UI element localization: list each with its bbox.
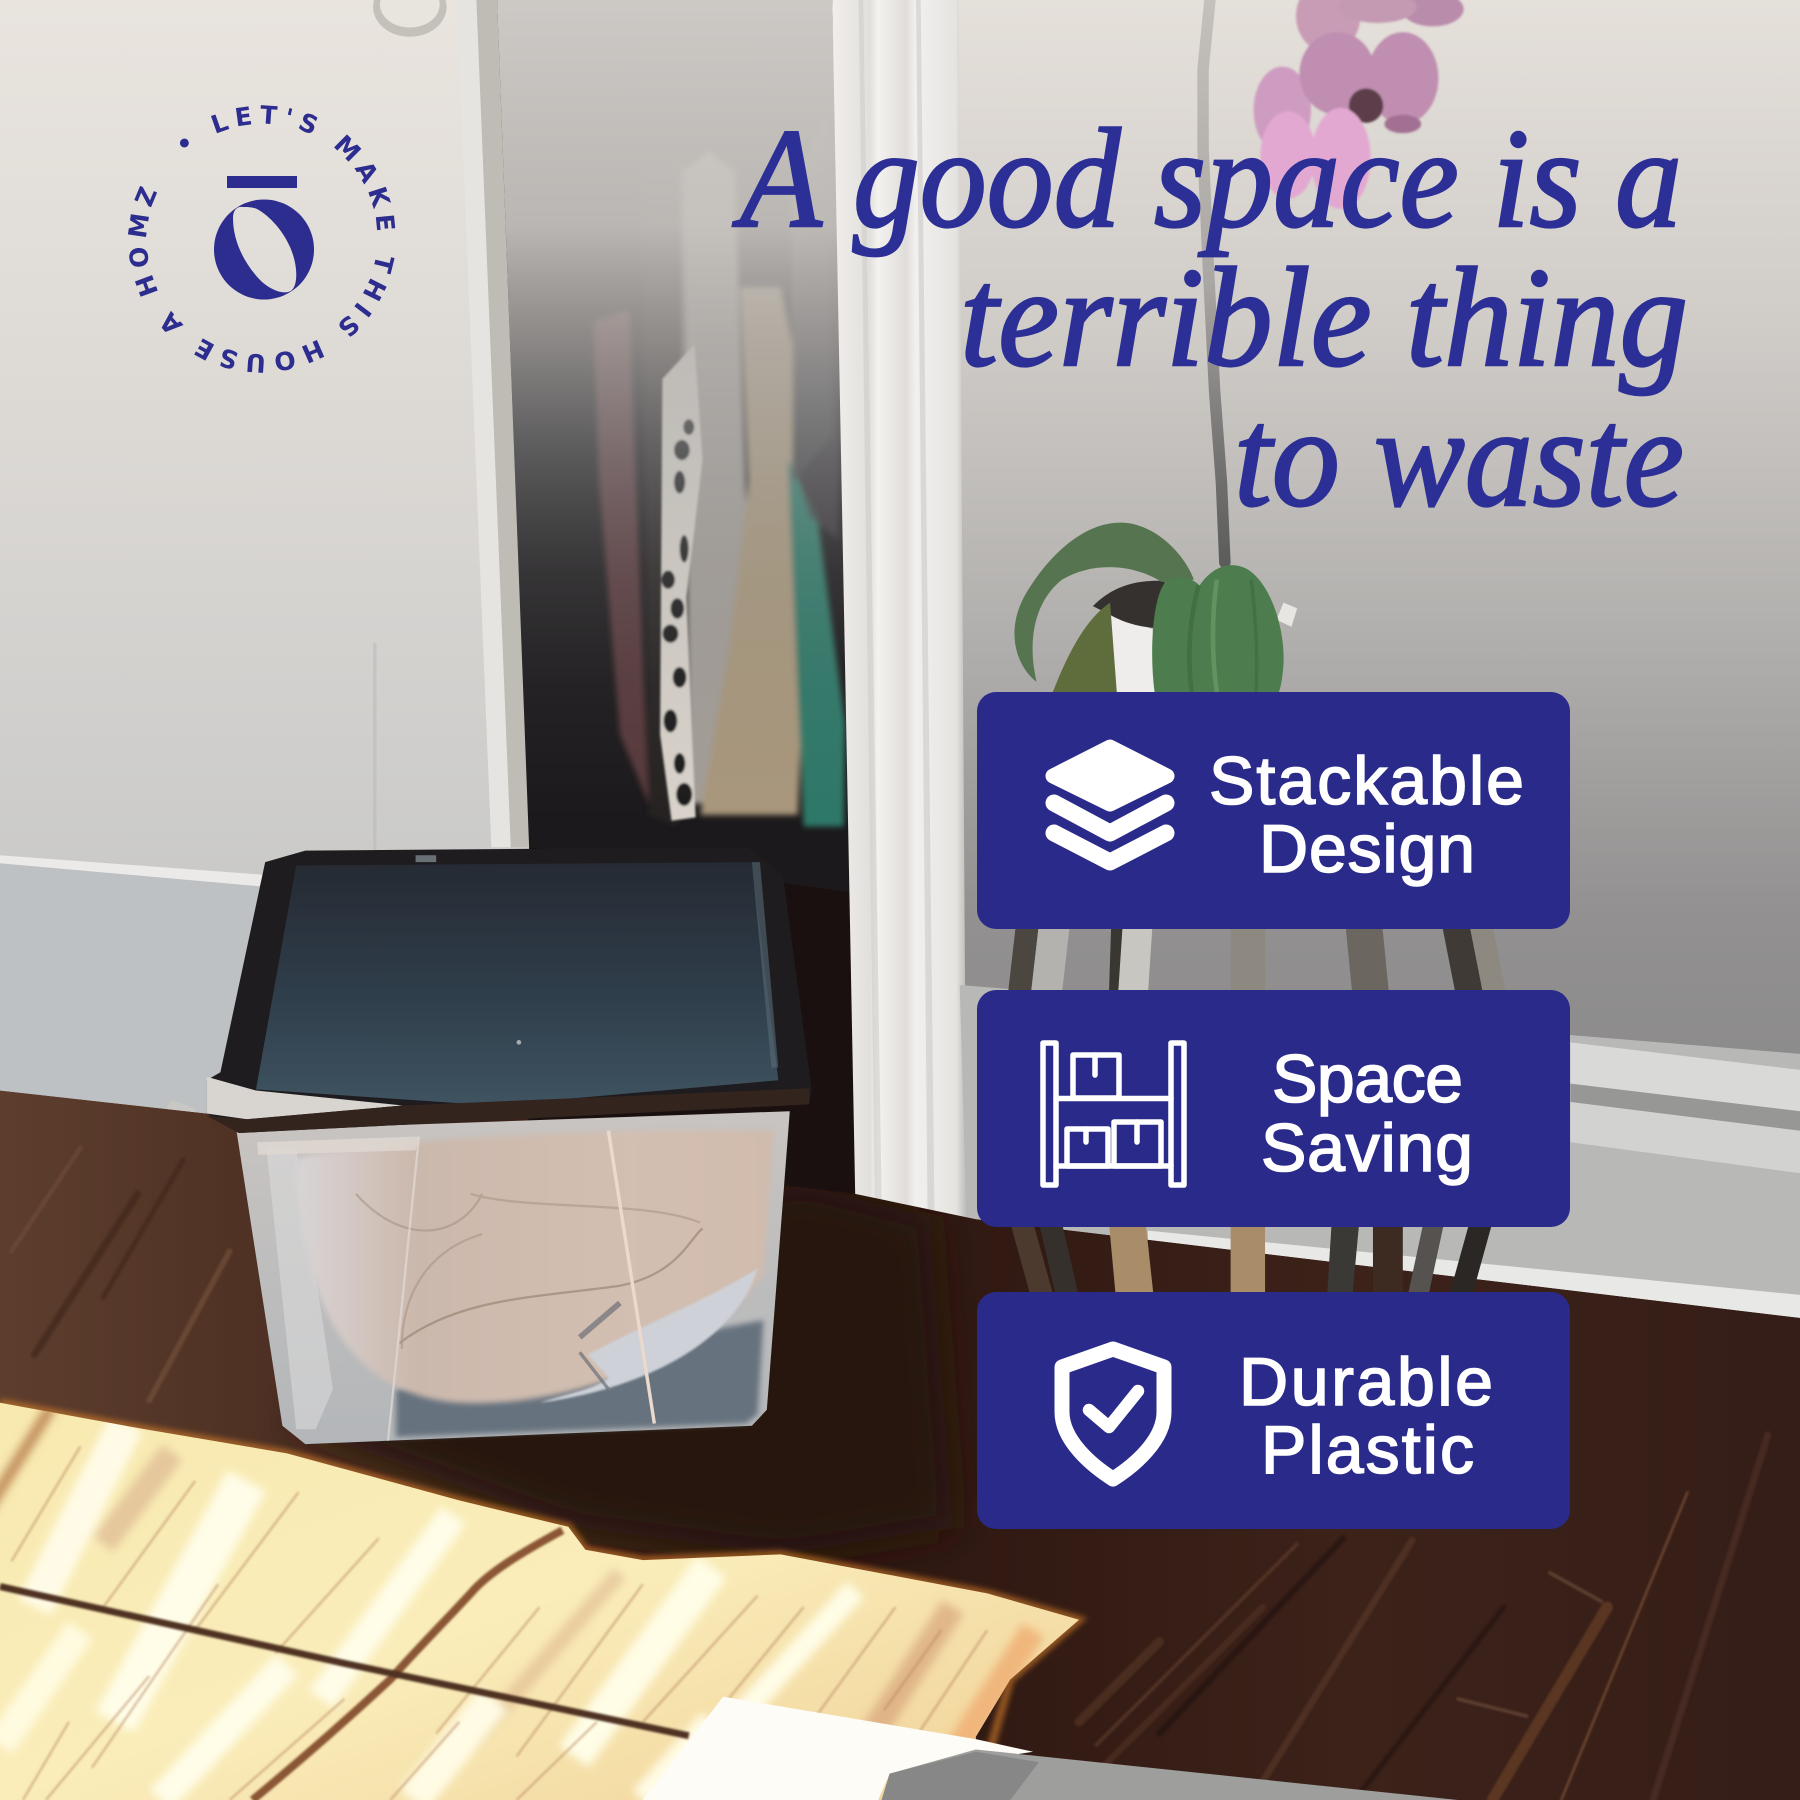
orchid flowers bbox=[1254, 0, 1464, 209]
white door trim bbox=[832, 0, 967, 1219]
logo macron bar bbox=[227, 176, 297, 188]
card: durable plastic bbox=[977, 1292, 1570, 1529]
icon: warehouse shelf with boxes bbox=[1043, 1043, 1184, 1185]
headline: to waste bbox=[1234, 378, 1684, 536]
box translucent seams bbox=[257, 1131, 654, 1441]
label: stackable design bbox=[1209, 743, 1524, 887]
plastic storage box body bbox=[236, 1111, 790, 1444]
dark gap behind the box bbox=[528, 847, 861, 1217]
label: stackable design: Stackable bbox=[1209, 743, 1524, 819]
card: stackable design bbox=[977, 692, 1570, 929]
icon: shield with check mark bbox=[1062, 1349, 1164, 1479]
headline bbox=[732, 99, 1688, 536]
folded blanket inside the box bbox=[296, 1130, 774, 1403]
label: space saving: Saving bbox=[1261, 1110, 1473, 1186]
closet interior with hanging clothes bbox=[494, 0, 861, 907]
logo circular text: • LET'S MAKE THIS HOUSE A HOMZ bbox=[128, 105, 396, 373]
logo letter O bbox=[214, 200, 314, 300]
label: space saving: Space bbox=[1272, 1041, 1463, 1117]
label: space saving bbox=[1261, 1041, 1473, 1186]
door handle hole bbox=[373, 0, 447, 37]
label: stackable design: Design bbox=[1259, 811, 1475, 887]
storage box black lid bbox=[207, 847, 812, 1133]
baseboard bbox=[960, 985, 1800, 1320]
plant leaves and white pot bbox=[1014, 523, 1297, 695]
wall bbox=[953, 0, 1800, 1079]
headline: terrible thing bbox=[960, 238, 1688, 396]
headline: A good space is a bbox=[732, 99, 1682, 257]
sliding door bbox=[0, 0, 540, 907]
card: space saving bbox=[977, 990, 1570, 1227]
label: durable plastic bbox=[1239, 1344, 1493, 1488]
wooden floor bbox=[0, 1091, 1800, 1800]
orchid stem bbox=[1203, 0, 1225, 562]
side table legs between the cards bbox=[1008, 924, 1506, 1297]
label: durable plastic: Durable bbox=[1239, 1344, 1493, 1420]
label: durable plastic: Plastic bbox=[1261, 1412, 1474, 1488]
rug in the corner bbox=[643, 1697, 1458, 1800]
sunlight patch on the floor bbox=[0, 1403, 1079, 1800]
lower door panel bbox=[0, 855, 264, 1134]
icon: stacked layers bbox=[1053, 747, 1167, 862]
logo badge with circular tagline bbox=[128, 105, 396, 373]
